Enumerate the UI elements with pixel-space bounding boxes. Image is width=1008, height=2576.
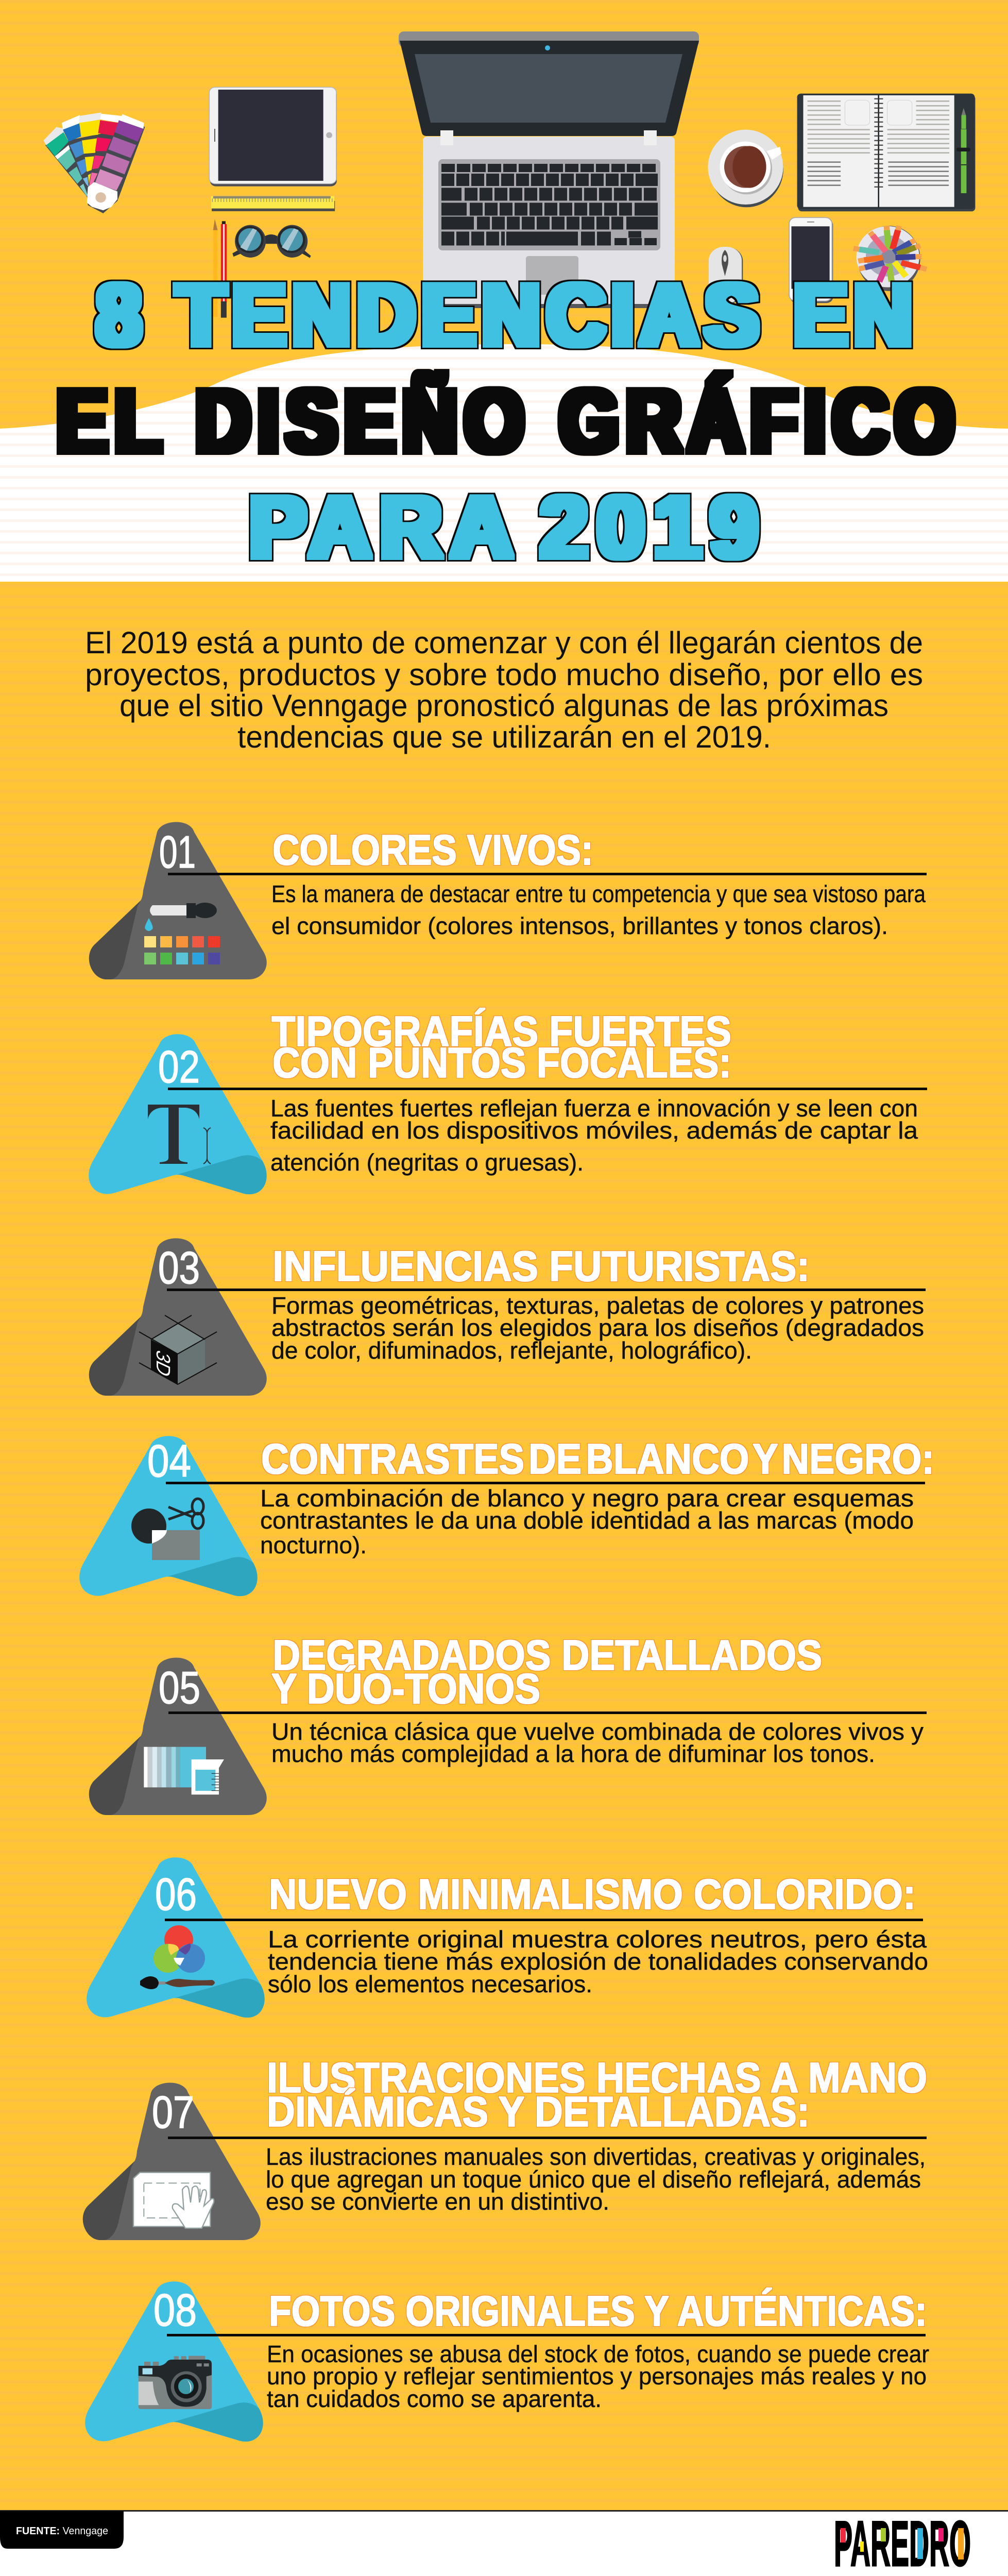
- number 03: 03: [158, 1242, 200, 1293]
- triangle badge 06: [87, 1857, 265, 2018]
- heading 01: COLORES VIVOS:: [272, 826, 593, 874]
- heading 07: ILUSTRACIONES HECHAS A MANO: [267, 2054, 927, 2102]
- number 07: 07: [152, 2087, 194, 2138]
- panel: trend 08 fotos: [85, 2281, 929, 2442]
- triangle badge 08: [85, 2281, 263, 2442]
- title: [57, 265, 954, 577]
- panel: trend 01 colores vivos: [89, 822, 927, 979]
- heading 05: DEGRADADOS DETALLADOS: [272, 1631, 822, 1679]
- icon: mouse: [709, 247, 743, 304]
- body 05: Un técnica clásica que vuelve combinada de colores vivos y: [271, 1718, 924, 1745]
- intro text: [85, 625, 923, 754]
- body 08: [267, 2341, 929, 2412]
- icon: serif T and cursor: [148, 1105, 211, 1164]
- heading 05 line 2: Y DÚO-TONOS: [271, 1665, 540, 1713]
- intro text: tendencias que se utilizarán en el 2019.: [237, 720, 771, 754]
- number 06: 06: [155, 1869, 197, 1920]
- body 01: Es la manera de destacar entre tu competencia y que sea vistoso para: [271, 880, 926, 907]
- triangle badge 05: [89, 1657, 267, 1815]
- triangle badge 03: [89, 1238, 267, 1396]
- body 05: mucho más complejidad a la hora de difuminar los tonos.: [271, 1740, 875, 1767]
- body 07: Las ilustraciones manuales son divertidas, creativas y originales,: [266, 2143, 926, 2170]
- number 04: 04: [147, 1435, 191, 1486]
- triangle badge 07: [83, 2082, 261, 2240]
- icon: notebook: [797, 94, 975, 211]
- number 01: 01: [159, 826, 196, 877]
- body 03: de color, difuminados, reflejante, holográfico).: [271, 1337, 752, 1364]
- triangle badge 02: [89, 1034, 267, 1194]
- panel: trend 05 degradados: [89, 1631, 927, 1815]
- body 05: [271, 1718, 924, 1767]
- heading 03: INFLUENCIAS FUTURISTAS:: [272, 1242, 810, 1290]
- body 03: abstractos serán los elegidos para los diseños (degradados: [271, 1314, 924, 1341]
- heading 02: TIPOGRAFÍAS FUERTES: [271, 1007, 731, 1055]
- intro text: que el sitio Venngage pronosticó algunas de las próximas: [119, 688, 889, 723]
- icon: dropper and colour chips: [144, 903, 220, 964]
- body 02: Las fuentes fuertes reflejan fuerza e innovación y se leen con: [270, 1095, 918, 1122]
- heading 04: CONTRASTES DE BLANCO Y NEGRO:: [261, 1435, 934, 1483]
- body 06: [268, 1926, 928, 1997]
- heading 06: NUEVO MINIMALISMO COLORIDO:: [269, 1870, 916, 1918]
- triangle badge 01: [89, 822, 267, 979]
- icon: ruler: [211, 196, 335, 211]
- number 08: 08: [153, 2284, 197, 2335]
- title line 2: EL DISEÑO GRÁFICO: [57, 371, 954, 471]
- body 04: La combinación de blanco y negro para crear esquemas: [260, 1485, 914, 1512]
- panel: trend 07 ilustraciones: [83, 2054, 927, 2240]
- panel: trend 06 minimalismo: [87, 1857, 928, 2018]
- icon: smartphone: [789, 217, 833, 303]
- panel: white header hill: [0, 344, 1008, 582]
- body 08: En ocasiones se abusa del stock de fotos, cuando se puede crear: [267, 2341, 929, 2367]
- icon: laptop: [399, 31, 699, 308]
- intro text: proyectos, productos y sobre todo mucho diseño, por ello es: [85, 657, 923, 692]
- body 04: nocturno).: [260, 1532, 367, 1558]
- icon: circle, square and scissors: [131, 1499, 203, 1560]
- body 01: [271, 880, 926, 939]
- body 07: lo que agregan un toque único que el diseño reflejará, además: [266, 2166, 921, 2193]
- body 06: sólo los elementos necesarios.: [268, 1971, 592, 1997]
- panel: trend 02 tipografias: [89, 1007, 927, 1194]
- heading 02 line 2: CON PUNTOS FOCALES:: [272, 1039, 731, 1087]
- icon: 3D cube: 3D: [152, 1347, 174, 1380]
- number 05: 05: [159, 1662, 200, 1713]
- icon: pencils: [213, 219, 227, 318]
- body 07: eso se convierte en un distintivo.: [266, 2188, 609, 2215]
- body 04: [260, 1485, 914, 1558]
- panel: trend 03 influencias futuristas: [89, 1238, 926, 1396]
- icon: tablet: [209, 87, 337, 187]
- intro text: El 2019 está a punto de comenzar y con él llegarán cientos de: [85, 625, 923, 660]
- panel: trend 04 contrastes: [79, 1435, 934, 1596]
- icon: coffee cup: [708, 130, 783, 207]
- icon: camera: [139, 2356, 212, 2409]
- body 07: [266, 2143, 926, 2215]
- body 08: uno propio y reflejar sentimientos y personajes más reales y no: [267, 2363, 927, 2389]
- footer source tab: [0, 2511, 124, 2549]
- icon: paper and hand: [133, 2173, 214, 2228]
- body 02: [270, 1095, 918, 1176]
- title line 1: 8 TENDENCIAS EN: [96, 265, 912, 364]
- body 02: atención (negritas o gruesas).: [270, 1149, 584, 1176]
- body 06: La corriente original muestra colores neutros, pero ésta: [268, 1926, 927, 1953]
- icon: colour swatch fan: [44, 112, 145, 213]
- triangle badge 04: [79, 1436, 258, 1596]
- body 03: [271, 1292, 924, 1364]
- body 04: contrastantes le da una doble identidad a las marcas (modo: [260, 1507, 914, 1534]
- body 01: el consumidor (colores intensos, brillantes y tonos claros).: [271, 912, 888, 939]
- title line 3: PARA 2019: [249, 478, 758, 577]
- icon: colour circles and brush: [140, 1925, 215, 1989]
- source text: FUENTE: Venngage: [16, 2526, 108, 2537]
- icon: pencil holder: [853, 226, 927, 291]
- icon: 3D cube: [139, 1315, 217, 1384]
- body 03: Formas geométricas, texturas, paletas de colores y patrones: [271, 1292, 924, 1319]
- heading 07 line 2: DINÁMICAS Y DETALLADAS:: [267, 2088, 810, 2136]
- number 02: 02: [158, 1041, 200, 1092]
- icon: gradient strip and beaker: [144, 1747, 224, 1794]
- body 08: tan cuidados como se aparenta.: [267, 2385, 602, 2412]
- body 02: facilidad en los dispositivos móviles, además de captar la: [270, 1117, 918, 1144]
- body 06: tendencia tiene más explosión de tonalidades conservando: [268, 1948, 928, 1975]
- icon: glasses: [232, 225, 311, 258]
